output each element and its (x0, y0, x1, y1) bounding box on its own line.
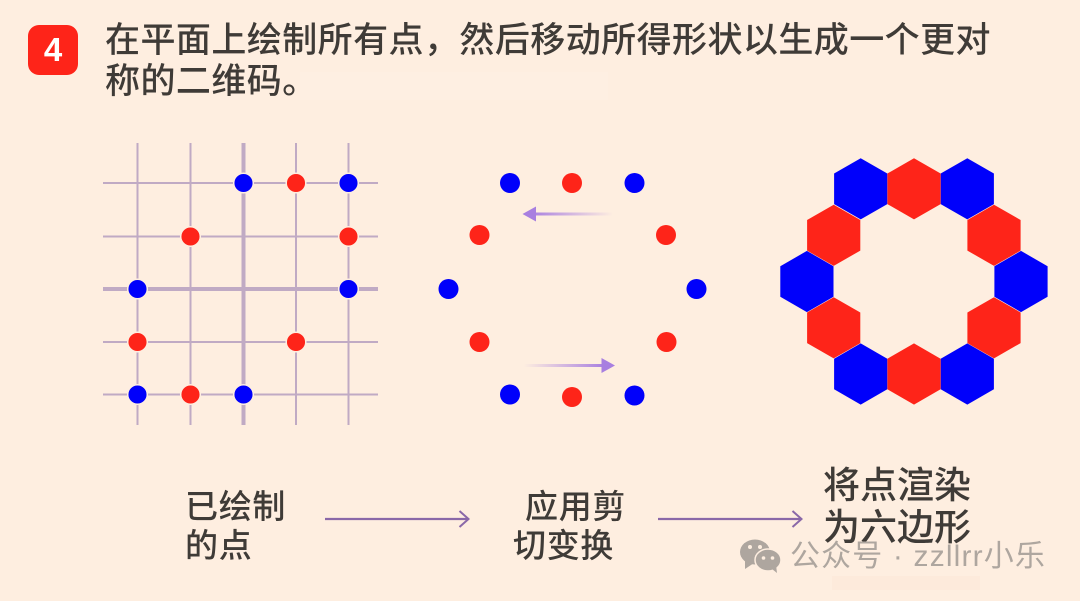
faint patch behind title second line (300, 72, 608, 100)
label: plotted points: 已绘制 (185, 488, 286, 525)
title (105, 21, 991, 100)
label: plotted points (185, 488, 286, 564)
arrow: shear left (522, 206, 613, 222)
label: render as hexagons: 为六边形 (823, 507, 971, 548)
label: plotted points: 的点 (185, 527, 252, 564)
label: render as hexagons: 将点渲染 (823, 465, 971, 506)
hexagon ring (780, 158, 1048, 405)
arrow: shear right (524, 358, 615, 373)
watermark: 公众号 · zzllrr小乐 (790, 540, 1046, 573)
label: apply shear (513, 488, 626, 564)
arrow: step one to two (325, 511, 468, 527)
label: apply shear: 应用剪 (525, 488, 626, 525)
label: apply shear: 切变换 (513, 527, 614, 564)
step number badge: 4 (44, 31, 62, 68)
grid of plotted points (103, 143, 378, 425)
title: 在平面上绘制所有点，然后移动所得形状以生成一个更对 (105, 21, 991, 60)
title: 称的二维码。 (105, 62, 318, 100)
faint patch under watermark (832, 576, 980, 590)
label: render as hexagons (823, 465, 971, 548)
sheared points (438, 173, 706, 407)
step number badge (28, 25, 78, 75)
icon: wechat (740, 540, 781, 573)
arrow: step two to three (658, 511, 802, 527)
